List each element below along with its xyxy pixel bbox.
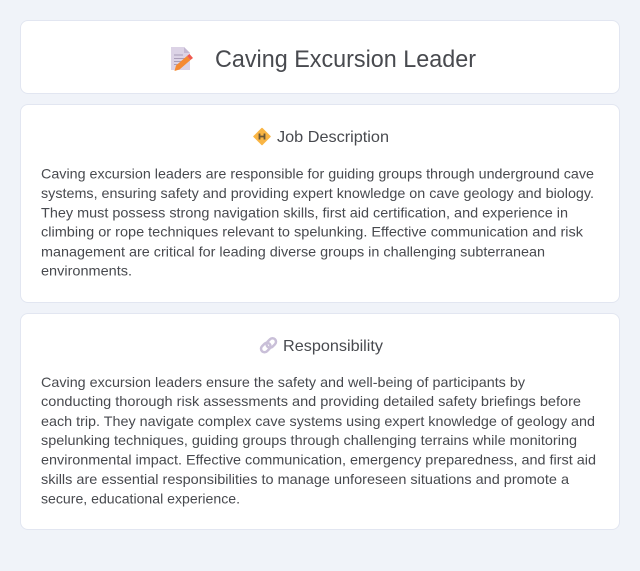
icon: chain link <box>260 337 277 354</box>
panel: job description card <box>20 104 620 303</box>
heading: job description: Job Description <box>277 129 389 146</box>
text block: responsibility: spelunking techniques, guiding groups through challenging terrains while monitoring <box>41 432 577 448</box>
text block: responsibility: each trip. They navigate complex cave systems using expert knowledge of geology and <box>41 413 595 429</box>
panel: title card <box>20 20 620 94</box>
text block: job description: Caving excursion leaders are responsible for guiding groups through underground cave <box>41 166 594 182</box>
text block: job description: environments. <box>41 262 132 278</box>
text block: responsibility: environmental impact. Effective communication, emergency preparedness, and first aid <box>41 452 596 468</box>
icon: document with pencil <box>171 47 193 71</box>
text block: job description: They must possess strong navigation skills, first aid certification, and experience in <box>41 204 568 220</box>
text block: job description: management are critical for leading diverse groups in challenging subterranean <box>41 244 545 260</box>
text block: responsibility: Caving excursion leaders ensure the safety and well-being of participants by <box>41 374 525 390</box>
panel: responsibility card <box>20 313 620 530</box>
text block: responsibility: secure, educational experience. <box>41 490 240 506</box>
title: Caving Excursion Leader <box>215 46 476 73</box>
text block: responsibility <box>41 374 596 506</box>
text block: responsibility: skills are essential responsibilities to manage unforeseen situations and promote a <box>41 471 569 487</box>
text block: job description: climbing or rope techniques relevant to spelunking. Effective communication and risk <box>41 224 584 240</box>
icon: diamond road sign <box>254 128 270 144</box>
text block: job description: systems, ensuring safety and providing expert knowledge on cave geology and biology. <box>41 185 594 201</box>
text block: job description <box>41 166 594 278</box>
heading: responsibility: Responsibility <box>283 338 383 355</box>
text block: responsibility: conducting thorough risk assessments and providing detailed safety briefings before <box>41 393 581 409</box>
